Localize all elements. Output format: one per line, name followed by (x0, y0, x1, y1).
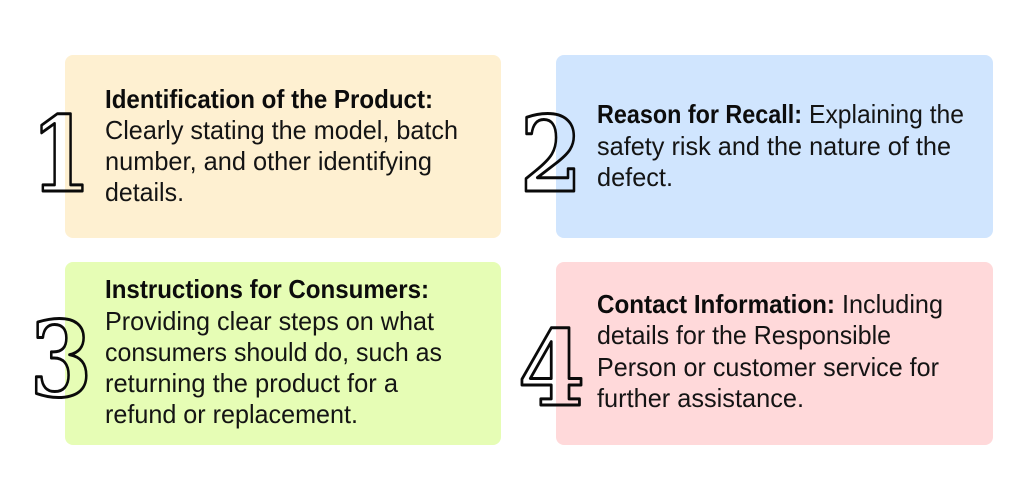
text block 3 (105, 274, 442, 429)
text block 4: Person or customer service for (597, 352, 939, 382)
text block 3: consumers should do, such as (105, 337, 442, 367)
text block 3: Instructions for Consumers: (105, 274, 429, 304)
number 2: 2 (520, 93, 582, 216)
number 4: 4 (518, 307, 585, 430)
text block 4: Contact Information: (597, 289, 835, 319)
text block 2: safety risk and the nature of the (597, 131, 951, 161)
text block 4: details for the Responsible (597, 320, 891, 350)
text block 2: Explaining the (809, 99, 964, 129)
text block 1: details. (105, 177, 184, 207)
card background 3 (65, 262, 501, 445)
text block 2: defect. (597, 162, 673, 192)
text block 1: number, and other identifying (105, 146, 432, 176)
text block 2: Reason for Recall: (597, 99, 802, 129)
card background 4 (556, 262, 993, 445)
panel: reason for recall (520, 55, 993, 238)
text block 1: Clearly stating the model, batch (105, 115, 458, 145)
panel: instructions for consumers (30, 262, 501, 445)
number 3: 3 (30, 298, 92, 421)
text block 2 (597, 99, 964, 192)
text block 4: Including (842, 289, 943, 319)
card background 2 (556, 55, 993, 238)
text block 1: Identification of the Product: (105, 84, 433, 114)
text block 4 (597, 289, 943, 413)
card background 1 (65, 55, 501, 238)
text block 3: returning the product for a (105, 368, 399, 398)
text block 3: Providing clear steps on what (105, 306, 435, 336)
panel: contact information (518, 262, 993, 445)
text block 1 (105, 84, 458, 207)
number 1: 1 (31, 93, 91, 216)
text block 3: refund or replacement. (105, 399, 358, 429)
panel: identification of the product (31, 55, 501, 238)
text block 4: further assistance. (597, 383, 804, 413)
